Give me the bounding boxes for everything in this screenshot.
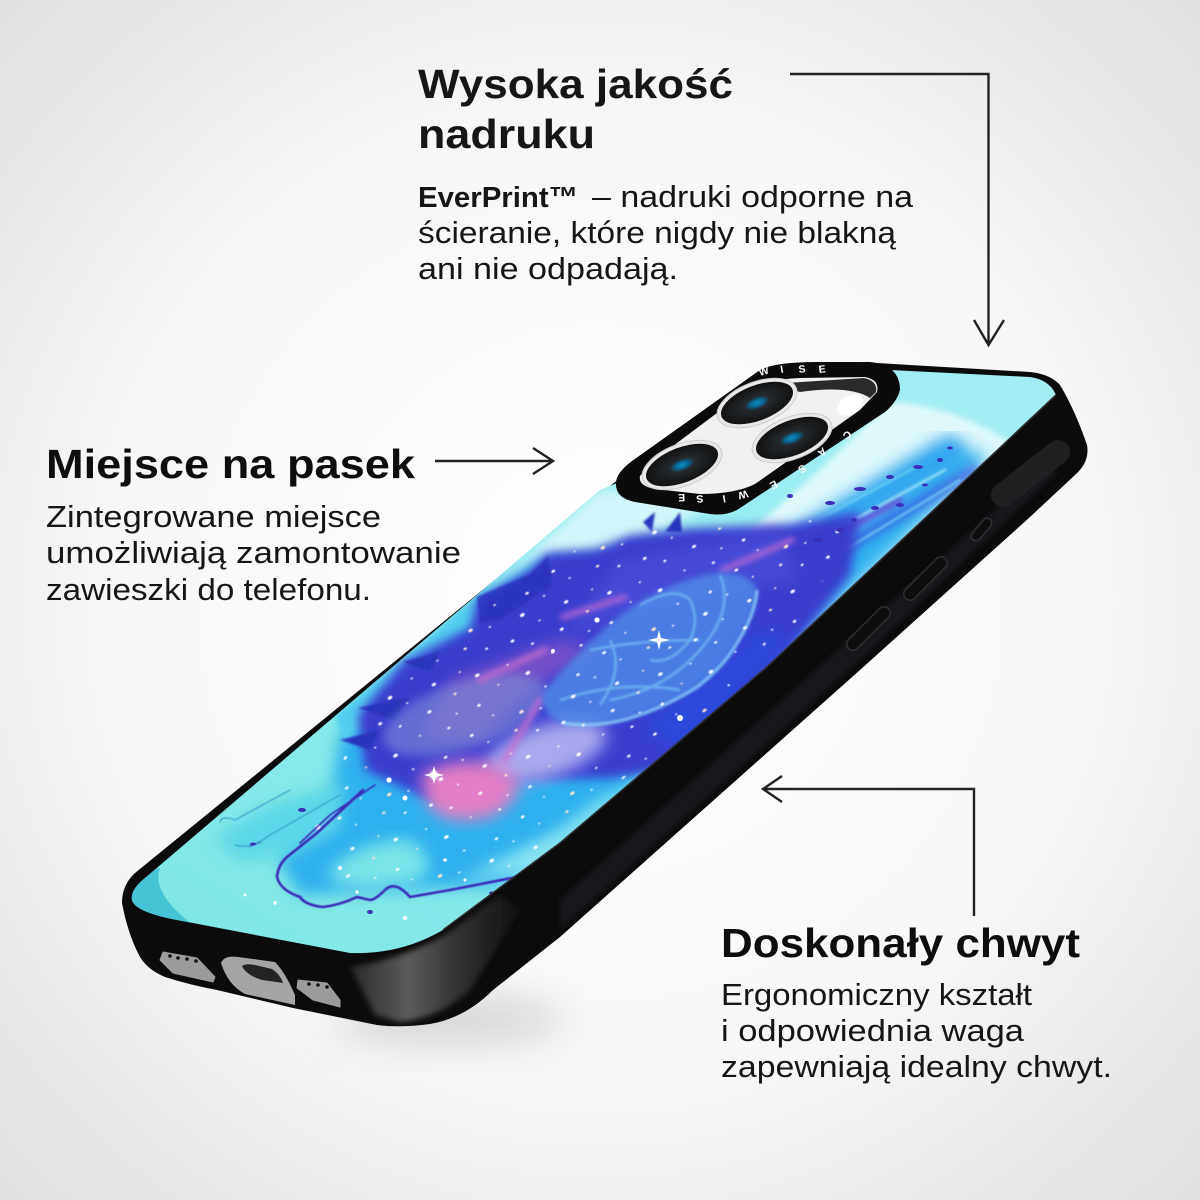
side buttons <box>853 452 1058 644</box>
camera island <box>616 362 900 514</box>
lens left <box>635 430 729 500</box>
arrow: to side grip <box>763 776 974 916</box>
description: print quality: – nadruki odporne na <box>592 180 913 214</box>
port holes <box>168 954 329 989</box>
description: strap mount: Zintegrowane miejsce <box>46 500 381 534</box>
description: print quality <box>418 180 913 286</box>
pink streaks <box>480 540 792 760</box>
star field <box>330 520 860 880</box>
brighter blue band <box>580 521 791 628</box>
usb port <box>221 957 295 1005</box>
description: grip: Ergonomiczny kształt <box>721 978 1033 1012</box>
description: strap mount: umożliwiają zamontowanie <box>46 536 461 570</box>
description: grip <box>721 978 1112 1084</box>
rim line <box>443 395 1056 930</box>
description: print quality: ani nie odpadają. <box>418 252 678 286</box>
description: grip: i odpowiednia waga <box>721 1014 1024 1048</box>
speaker left <box>160 952 215 982</box>
violet cloud <box>420 640 600 740</box>
splash flecks <box>250 416 953 914</box>
deep blue nebula <box>358 512 860 800</box>
heading: print quality: nadruku <box>418 111 595 157</box>
description: strap mount <box>46 500 461 607</box>
flash <box>833 390 867 420</box>
rich blue lower <box>647 631 784 746</box>
speaker right <box>297 980 340 1007</box>
description: print quality: EverPrint™ <box>418 182 578 214</box>
camera ring <box>616 362 900 514</box>
heading: grip: Doskonały chwyt <box>721 920 1080 966</box>
printed back surface <box>132 370 1056 954</box>
phone case <box>100 350 1100 1026</box>
lens right <box>745 403 839 473</box>
heading: print quality <box>418 61 733 157</box>
text block: strap mount <box>46 441 461 607</box>
heading: print quality: Wysoka jakość <box>418 61 733 107</box>
text block: grip <box>721 920 1112 1084</box>
blue edge spikes <box>340 512 682 750</box>
cyan splash <box>278 450 990 895</box>
lilac cloud <box>476 707 614 797</box>
heading: strap mount: Miejsce na pasek <box>46 441 415 487</box>
side wall sheen <box>560 470 1060 930</box>
case body <box>122 362 1088 1026</box>
description: strap mount: zawieszki do telefonu. <box>46 573 371 607</box>
lens top <box>710 368 804 438</box>
camera glass <box>640 377 878 494</box>
arrow: to strap mount <box>435 448 553 474</box>
upper right streaks <box>780 452 975 575</box>
second jelly <box>380 670 548 760</box>
arrow: to print surface <box>790 74 1004 345</box>
jellyfish bubble <box>543 573 757 725</box>
cyan along left edge <box>334 610 476 738</box>
phone shadow <box>335 1000 565 1040</box>
brand text lower: CASEWISE <box>678 428 854 505</box>
brand text upper: CASEWISE <box>663 363 826 433</box>
description: grip: zapewniają idealny chwyt. <box>721 1050 1112 1084</box>
corner tint <box>132 868 190 922</box>
text block: print quality <box>418 61 913 286</box>
teal patches <box>330 840 428 888</box>
pale area near camera <box>499 485 704 581</box>
pale swoosh <box>752 400 1009 627</box>
drips <box>220 785 517 907</box>
glossy corner highlight <box>350 895 520 1022</box>
bright stars <box>244 617 683 920</box>
bottom ports <box>160 952 340 1007</box>
description: print quality: ścieranie, które nigdy nie blakną <box>418 216 896 250</box>
pink cloud <box>420 761 518 821</box>
